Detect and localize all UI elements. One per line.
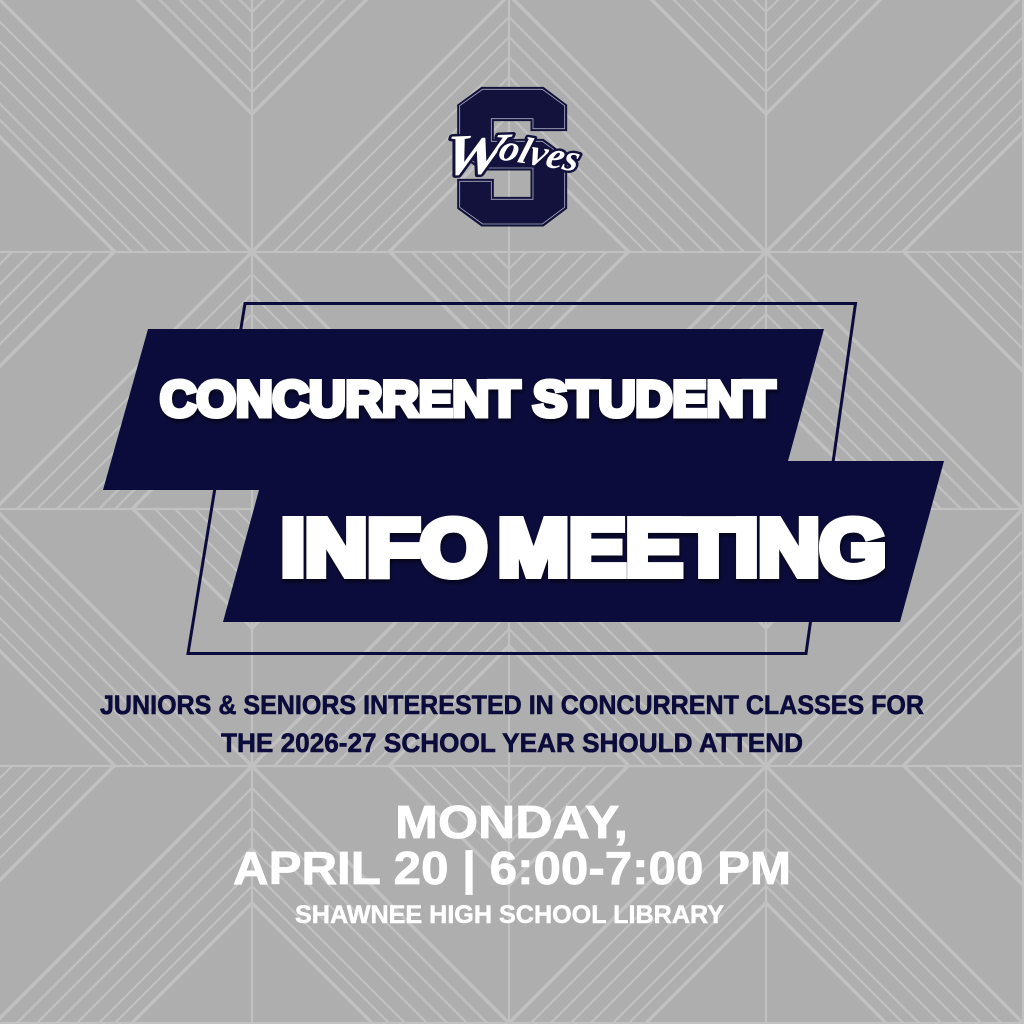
title banner xyxy=(103,329,944,622)
date and time: MONDAY, xyxy=(395,796,628,848)
title line 2: INFO xyxy=(281,503,487,592)
audience text: JUNIORS & SENIORS INTERESTED IN CONCURRENT CLASSES FOR xyxy=(100,690,924,720)
title line 2 xyxy=(281,503,886,592)
location: SHAWNEE HIGH SCHOOL LIBRARY xyxy=(295,901,724,929)
title line 2: MEETING xyxy=(498,503,886,592)
title line 1: STUDENT xyxy=(533,371,775,427)
audience text xyxy=(100,690,924,758)
frame outline xyxy=(188,304,856,654)
audience text: THE 2026-27 SCHOOL YEAR SHOULD ATTEND xyxy=(221,728,803,758)
title line 1 xyxy=(160,371,775,427)
icon: Wolves S logo: olves xyxy=(494,127,586,180)
icon: Wolves S logo xyxy=(438,87,586,226)
date and time: APRIL 20 | 6:00-7:00 PM xyxy=(233,842,791,894)
icon: Wolves S logo: W xyxy=(438,121,516,188)
date and time xyxy=(233,796,791,894)
title line 1: CONCURRENT xyxy=(160,371,520,427)
